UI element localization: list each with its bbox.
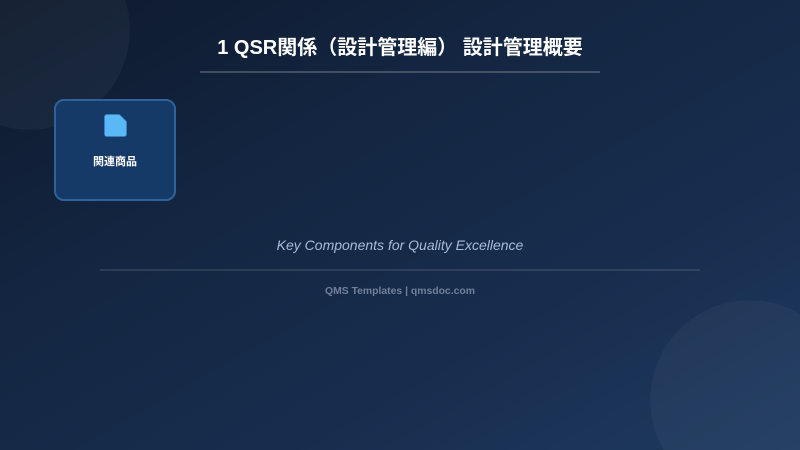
panel: related products card	[54, 99, 176, 201]
title: 1 QSR関係（設計管理編） 設計管理概要	[217, 37, 583, 59]
decorative circle: top left	[0, 0, 130, 130]
icon: document	[104, 114, 127, 137]
footer text: QMS Templates | qmsdoc.com	[325, 286, 475, 297]
card label: 関連商品	[93, 156, 137, 168]
decorative circle: bottom right	[650, 300, 800, 450]
tagline: Key Components for Quality Excellence	[277, 237, 523, 253]
